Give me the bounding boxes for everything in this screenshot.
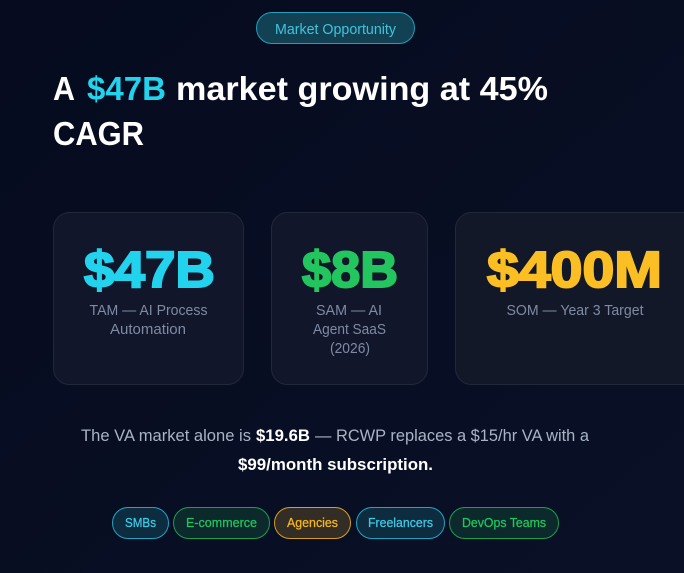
- tags: [112, 508, 558, 538]
- panel: TAM: [54, 212, 244, 384]
- SAM label: [313, 302, 386, 357]
- tag: Agencies: Agencies: [287, 515, 338, 530]
- tag: E-commerce: E-commerce: [186, 515, 257, 530]
- TAM label: [90, 302, 208, 338]
- tag: SMBs: [112, 508, 168, 538]
- TAM label: Automation: [110, 321, 186, 338]
- title: $47B: [87, 70, 166, 107]
- SAM label: SAM — AI: [316, 302, 382, 319]
- tag: SMBs: SMBs: [125, 515, 156, 530]
- tag: Agencies: [274, 508, 350, 538]
- body text: $99/month subscription.: [238, 456, 433, 474]
- SAM value: $8B: [302, 241, 398, 298]
- panel: SOM: [456, 212, 684, 384]
- SAM label: Agent SaaS: [313, 321, 386, 338]
- body text: — RCWP replaces a $15/hr VA with a: [315, 427, 590, 445]
- tag: DevOps Teams: DevOps Teams: [462, 515, 546, 530]
- SOM value: $400M: [487, 241, 662, 298]
- body text: The VA market alone is: [81, 427, 251, 445]
- panel: SAM: [272, 212, 428, 384]
- TAM label: TAM — AI Process: [90, 302, 208, 319]
- badge: Market Opportunity: [256, 12, 414, 44]
- SOM label: SOM — Year 3 Target: [506, 302, 644, 319]
- body text: $19.6B: [256, 427, 310, 445]
- badge: Market Opportunity: Market Opportunity: [275, 22, 397, 38]
- tag: DevOps Teams: [450, 508, 558, 538]
- title: CAGR: [53, 115, 144, 152]
- tag: Freelancers: Freelancers: [368, 515, 433, 530]
- tag: Freelancers: [356, 508, 444, 538]
- body text: [81, 427, 590, 474]
- title: A: [53, 70, 75, 107]
- title: market growing at 45%: [176, 70, 548, 107]
- title: [53, 70, 548, 152]
- tag: E-commerce: [174, 508, 270, 538]
- TAM value: $47B: [84, 241, 215, 298]
- SAM label: (2026): [330, 340, 370, 357]
